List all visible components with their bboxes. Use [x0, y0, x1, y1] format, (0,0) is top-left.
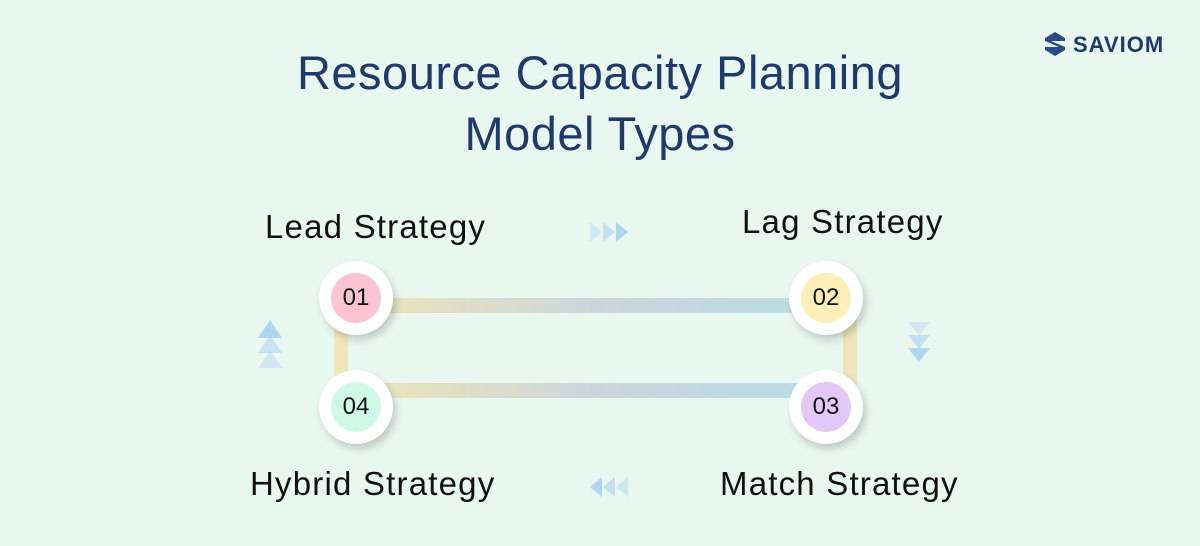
- title: Model Types: [464, 107, 736, 160]
- arrows: down: [908, 322, 930, 362]
- arrows: up: [258, 320, 282, 368]
- step 03: 03: [813, 393, 839, 420]
- arrows: left: [590, 477, 628, 497]
- step 01: 01: [343, 284, 369, 311]
- arrows: right: [590, 222, 628, 242]
- title: Resource Capacity Planning: [297, 46, 903, 99]
- label lag: Lag Strategy: [742, 203, 944, 240]
- step 02: [789, 261, 863, 335]
- label lead: Lead Strategy: [265, 208, 486, 245]
- step 04: [319, 370, 393, 444]
- label match: Match Strategy: [720, 465, 959, 502]
- step 01: [319, 261, 393, 335]
- logo: SAVIOM: [1073, 32, 1164, 57]
- step 04: 04: [343, 393, 369, 420]
- title: [297, 46, 903, 160]
- step 02: 02: [813, 284, 839, 311]
- step 03: [789, 370, 863, 444]
- label hybrid: Hybrid Strategy: [250, 465, 495, 502]
